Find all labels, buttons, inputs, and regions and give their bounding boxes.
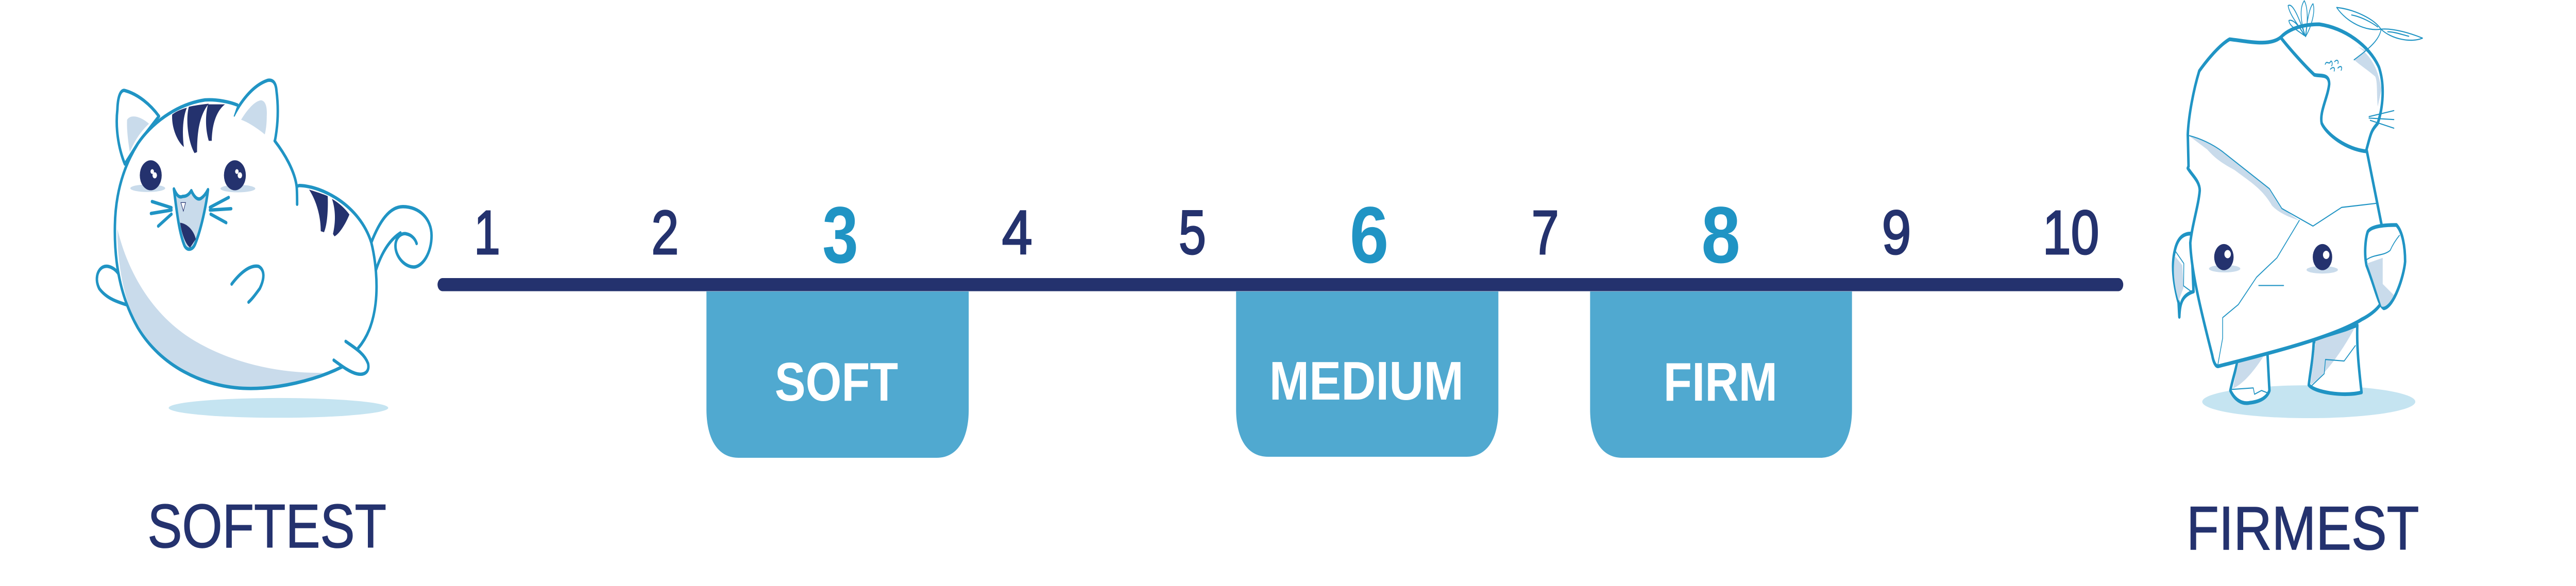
rock whiskers	[2369, 111, 2394, 128]
rock head crack line	[2281, 38, 2366, 151]
cat right inner ear	[241, 100, 267, 134]
rock left leg	[2230, 353, 2269, 403]
softest label: SOFTEST	[147, 492, 386, 561]
rock right leg	[2309, 325, 2362, 394]
scale numbers: 8	[1701, 191, 1740, 280]
rock mouth	[2259, 285, 2284, 286]
rock blush	[2209, 265, 2338, 273]
scale numbers: 1	[474, 198, 500, 267]
rock ground shadow	[2202, 385, 2415, 418]
cat front arm	[232, 266, 263, 302]
rock eyes	[2214, 244, 2332, 270]
cat mascot: softest	[97, 80, 432, 418]
scale numbers: 6	[1350, 191, 1388, 280]
cat ground shadow	[168, 398, 388, 418]
cat whiskers	[151, 197, 231, 226]
rock head shading	[2354, 47, 2381, 107]
rock left arm	[2173, 234, 2194, 317]
cat blush	[130, 184, 256, 193]
cat stripes	[172, 104, 349, 236]
scale numbers: 2	[651, 198, 679, 267]
rock texture squiggle	[2325, 60, 2342, 71]
tab: firm: FIRM	[1664, 351, 1777, 412]
scale numbers: 5	[1179, 198, 1206, 267]
firmest label: FIRMEST	[2187, 494, 2419, 563]
scale numbers	[474, 191, 2099, 280]
scale numbers: 3	[822, 191, 858, 280]
cat tail	[371, 206, 432, 270]
scale numbers: 10	[2043, 198, 2099, 267]
cat rear foot	[334, 341, 368, 374]
tab: medium: MEDIUM	[1269, 350, 1464, 411]
rock chest shading	[2190, 136, 2299, 220]
rock body cracks	[2189, 135, 2377, 365]
scale numbers: 4	[1002, 198, 1032, 267]
cat eyes	[140, 160, 246, 191]
rock right arm	[2365, 225, 2405, 308]
cat body outline	[115, 100, 377, 388]
cat left ear	[117, 91, 159, 164]
firmness scale bar	[437, 278, 2123, 291]
tab: soft: SOFT	[775, 351, 898, 412]
rock sprout	[2288, 1, 2314, 37]
rock mascot: firmest	[2173, 1, 2422, 418]
cat right ear	[232, 80, 278, 142]
cat left paw	[97, 266, 129, 305]
rock body and head	[2188, 24, 2383, 366]
cat body	[115, 100, 377, 388]
scale numbers: 9	[1882, 198, 1911, 267]
tab: firm	[1590, 291, 1852, 458]
tab: soft	[706, 291, 969, 458]
scale numbers: 7	[1532, 198, 1559, 267]
rock propeller leaves	[2336, 8, 2422, 60]
tab: medium	[1236, 291, 1498, 457]
cat belly shading	[117, 229, 323, 388]
cat mouth	[174, 189, 208, 249]
cat left inner ear	[127, 116, 149, 152]
